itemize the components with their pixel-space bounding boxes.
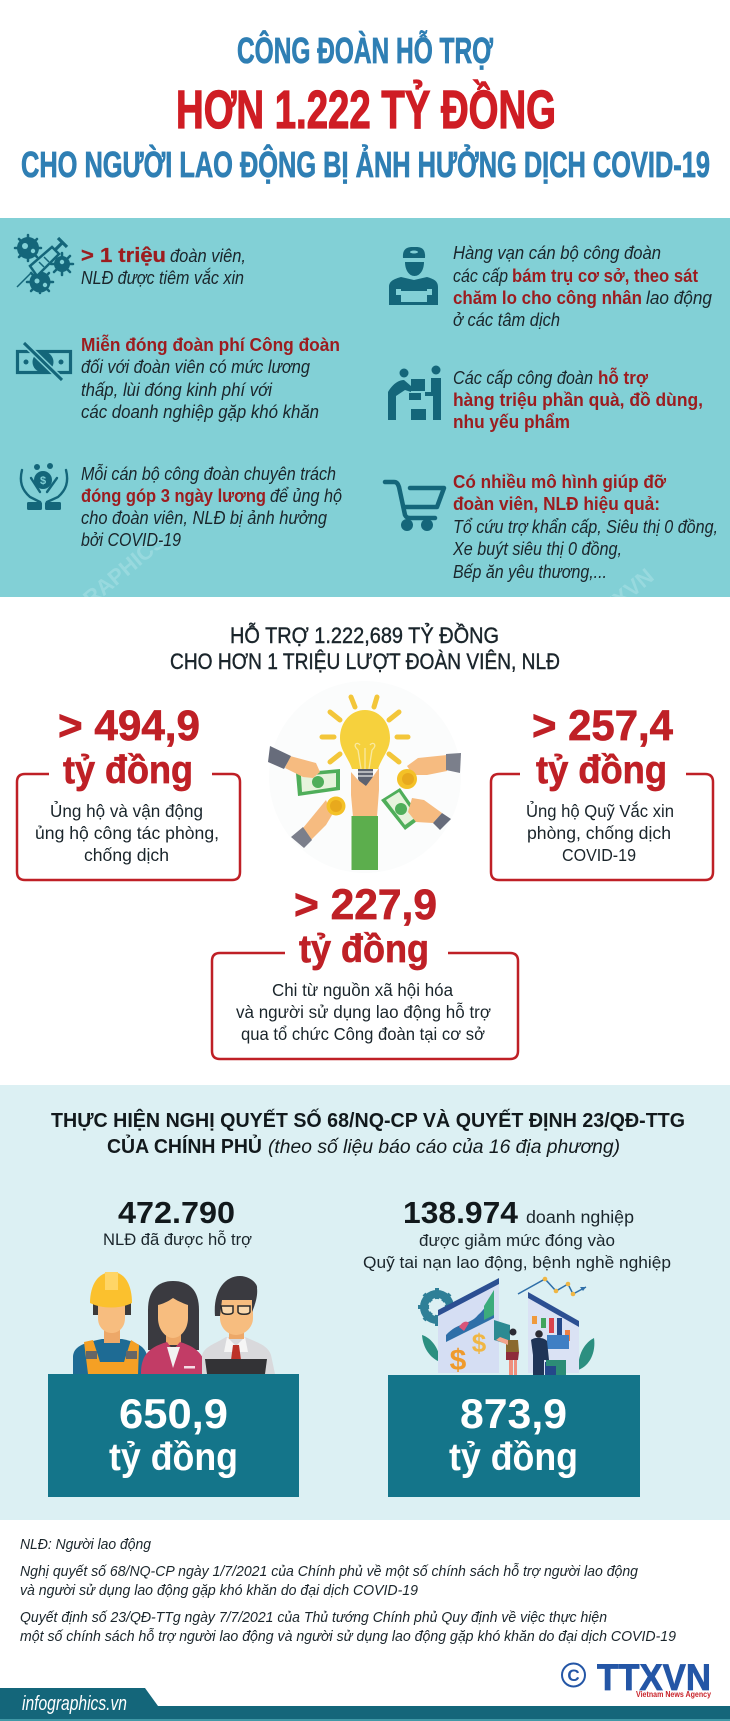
stat: 494,9 billion: > 494,9 bbox=[58, 702, 200, 750]
box: 873,9 billion: 873,9 bbox=[460, 1390, 567, 1437]
icon: bulb bbox=[340, 710, 390, 786]
footnotes: và người sử dụng lao động gặp khó khăn do đại dịch COVID-19 bbox=[20, 1582, 419, 1599]
icon: virus and syringe bbox=[15, 235, 73, 293]
footer band: infographics.vn bbox=[22, 1693, 127, 1715]
box: 873,9 billion bbox=[388, 1375, 640, 1497]
icon: office woman bbox=[141, 1281, 206, 1374]
heading: total support bbox=[170, 622, 560, 674]
stat: 227,9 billion: > 227,9 bbox=[294, 881, 437, 929]
icon: leaves bbox=[422, 1335, 594, 1370]
stat: workers supported: NLĐ đã được hỗ trợ bbox=[103, 1230, 252, 1249]
icon: lower right hand with banknote bbox=[381, 788, 451, 830]
text: gifts: nhu yếu phẩm bbox=[453, 412, 570, 432]
text: fee exemption: thấp, lùi đóng kinh phí với bbox=[81, 380, 273, 400]
text: fee exemption: Miễn đóng đoàn phí Công đoàn bbox=[81, 334, 340, 355]
stat: 257,4 billion: tỷ đồng bbox=[536, 749, 667, 792]
footer band bbox=[0, 1688, 730, 1721]
icon: right dashboard bbox=[528, 1292, 579, 1373]
heading: implementation: CỦA CHÍNH PHỦ bbox=[107, 1134, 262, 1158]
title bbox=[21, 29, 710, 185]
footnotes: một số chính sách hỗ trợ người lao động và người sử dụng lao động gặp khó khăn do đại dịch COVID-19 bbox=[20, 1628, 677, 1645]
text: vaccinated: đoàn viên, bbox=[170, 246, 246, 266]
icon: shopping cart bbox=[385, 482, 444, 531]
text: gifts bbox=[453, 367, 703, 432]
panel: union actions: TTXVN bbox=[587, 563, 658, 629]
illustration: three workers bbox=[73, 1272, 275, 1374]
footnotes: Quyết định số 23/QĐ-TTg ngày 7/7/2021 của Thủ tướng Chính phủ Quy định về việc thực hiện bbox=[20, 1609, 607, 1626]
icon: left dashboard bbox=[438, 1278, 510, 1377]
footnotes bbox=[20, 1536, 677, 1645]
title: CÔNG ĐOÀN HỖ TRỢ bbox=[237, 29, 493, 71]
text: staying at the base: lao động bbox=[646, 288, 712, 308]
text: three days of salary: Mỗi cán bộ công đoàn chuyên trách bbox=[81, 464, 336, 484]
text: fee exemption: các doanh nghiệp gặp khó khăn bbox=[81, 402, 319, 422]
stat: 227,9 billion: qua tổ chức Công đoàn tại cơ sở bbox=[241, 1024, 485, 1044]
heading: implementation bbox=[51, 1108, 685, 1158]
text: support models: Bếp ăn yêu thương,... bbox=[453, 562, 607, 582]
box: 873,9 billion: tỷ đồng bbox=[449, 1436, 578, 1479]
icon: man figure bbox=[531, 1330, 566, 1375]
text: three days of salary: đóng góp 3 ngày lương bbox=[81, 486, 266, 506]
text: staying at the base: bám trụ cơ sở, theo sát bbox=[512, 266, 698, 286]
panel: resolution 68 and decision 23 bbox=[0, 1085, 730, 1520]
box: 650,9 billion bbox=[48, 1374, 299, 1497]
stat: 257,4 billion: > 257,4 bbox=[532, 702, 673, 750]
stat: 257,4 billion: phòng, chống dịch bbox=[527, 823, 671, 843]
stat: businesses supported bbox=[363, 1195, 671, 1272]
icon: hands holding coin: $ bbox=[40, 475, 46, 487]
stat: businesses supported: 138.974 bbox=[403, 1195, 519, 1230]
icon: left dashboard: $ bbox=[450, 1344, 467, 1377]
text: gifts: hàng triệu phần quà, đồ dùng, bbox=[453, 390, 703, 410]
footnotes: NLĐ: Người lao động bbox=[20, 1536, 152, 1553]
icon: people handing parcels bbox=[388, 366, 441, 420]
stat: businesses supported: được giảm mức đóng vào bbox=[419, 1231, 615, 1250]
stat: 227,9 billion: Chi từ nguồn xã hội hóa bbox=[272, 980, 453, 1000]
stat: workers supported bbox=[103, 1195, 252, 1249]
icon: centre hand and green sleeve bbox=[351, 768, 379, 870]
panel: union actions: GRAPHICS bbox=[65, 528, 170, 622]
icon: hands holding coin bbox=[21, 463, 67, 510]
stat: 227,9 billion: tỷ đồng bbox=[299, 928, 429, 971]
heading: implementation: (theo số liệu báo cáo của 16 địa phương) bbox=[268, 1137, 620, 1158]
stat: 494,9 billion: Ủng hộ và vận động bbox=[50, 800, 203, 821]
icon: worker bbox=[389, 247, 438, 305]
icon: crossed-out banknote bbox=[18, 343, 70, 380]
icon: left dashboard: $ bbox=[472, 1328, 487, 1358]
box: 650,9 billion: tỷ đồng bbox=[109, 1436, 238, 1479]
text: staying at the base: chăm lo cho công nhân bbox=[453, 288, 642, 308]
stat: 257,4 billion: COVID-19 bbox=[562, 845, 636, 865]
title: HƠN 1.222 TỶ ĐỒNG bbox=[176, 80, 556, 140]
stat: workers supported: 472.790 bbox=[118, 1195, 235, 1230]
icon: bulb rays bbox=[322, 697, 408, 762]
stat: 257,4 billion bbox=[491, 702, 713, 880]
stat: 494,9 billion: tỷ đồng bbox=[63, 749, 193, 792]
icon: gear bbox=[418, 1288, 456, 1326]
panel: union actions bbox=[0, 218, 730, 629]
text: fee exemption bbox=[81, 334, 340, 422]
text: three days of salary: để ủng hộ bbox=[270, 486, 342, 506]
box: 650,9 billion: 650,9 bbox=[119, 1390, 228, 1437]
icon: growth arrow bbox=[518, 1277, 586, 1296]
heading: total support: CHO HƠN 1 TRIỆU LƯỢT ĐOÀN VIÊN, NLĐ bbox=[170, 649, 560, 674]
logo: TTXVN: TTXVN bbox=[597, 1657, 711, 1698]
text: three days of salary: bởi COVID-19 bbox=[81, 530, 181, 550]
text: support models: Có nhiều mô hình giúp đỡ bbox=[453, 472, 666, 492]
stat: businesses supported: doanh nghiệp bbox=[526, 1207, 634, 1227]
logo: TTXVN: C bbox=[567, 1666, 580, 1685]
text: staying at the base: Hàng vạn cán bộ công đoàn bbox=[453, 243, 661, 263]
stat: 494,9 billion: ủng hộ công tác phòng, bbox=[35, 823, 219, 843]
text: vaccinated: NLĐ được tiêm vắc xin bbox=[81, 268, 244, 288]
icon: construction worker bbox=[73, 1272, 147, 1374]
stat: 494,9 billion: chống dịch bbox=[84, 845, 169, 865]
stat: businesses supported: Quỹ tai nạn lao động, bệnh nghề nghiệp bbox=[363, 1253, 671, 1272]
stat: 257,4 billion: Ủng hộ Quỹ Vắc xin bbox=[526, 800, 674, 821]
stat: 494,9 billion bbox=[17, 702, 240, 880]
icon: lower left hand with coin bbox=[291, 796, 346, 848]
heading: total support: HỖ TRỢ 1.222,689 TỶ ĐỒNG bbox=[230, 622, 499, 648]
stat: 227,9 billion: và người sử dụng lao động hỗ trợ bbox=[236, 1001, 491, 1022]
footnotes: Nghị quyết số 68/NQ-CP ngày 1/7/2021 của Chính phủ về một số chính sách hỗ trợ người lao động bbox=[20, 1563, 639, 1580]
illustration: light bulb and hands with money bbox=[268, 681, 461, 873]
text: three days of salary bbox=[81, 464, 342, 550]
illustration: financial dashboards bbox=[418, 1277, 594, 1377]
icon: upper right hand with coin bbox=[397, 753, 461, 789]
text: three days of salary: cho đoàn viên, NLĐ bị ảnh hưởng bbox=[81, 508, 327, 528]
text: gifts: Các cấp công đoàn bbox=[453, 368, 593, 388]
text: staying at the base: ở các tâm dịch bbox=[453, 310, 560, 330]
text: support models bbox=[452, 472, 718, 582]
icon: woman figure bbox=[496, 1328, 519, 1375]
text: vaccinated: > 1 triệu bbox=[81, 245, 166, 267]
icon: man with glasses bbox=[202, 1276, 275, 1374]
text: staying at the base: các cấp bbox=[453, 266, 508, 286]
text: vaccinated bbox=[81, 245, 246, 288]
text: staying at the base bbox=[453, 243, 712, 330]
logo: TTXVN: Vietnam News Agency bbox=[636, 1689, 711, 1699]
icon: upper left hand with banknote bbox=[268, 746, 340, 796]
text: support models: đoàn viên, NLĐ hiệu quả: bbox=[453, 494, 660, 514]
stat: 227,9 billion bbox=[212, 881, 518, 1059]
text: support models: Xe buýt siêu thị 0 đồng, bbox=[452, 539, 622, 559]
heading: implementation: THỰC HIỆN NGHỊ QUYẾT SỐ 68/NQ-CP VÀ QUYẾT ĐỊNH 23/QĐ-TTG bbox=[51, 1108, 685, 1132]
text: gifts: hỗ trợ bbox=[598, 367, 648, 388]
text: fee exemption: đối với đoàn viên có mức lương bbox=[81, 357, 310, 377]
